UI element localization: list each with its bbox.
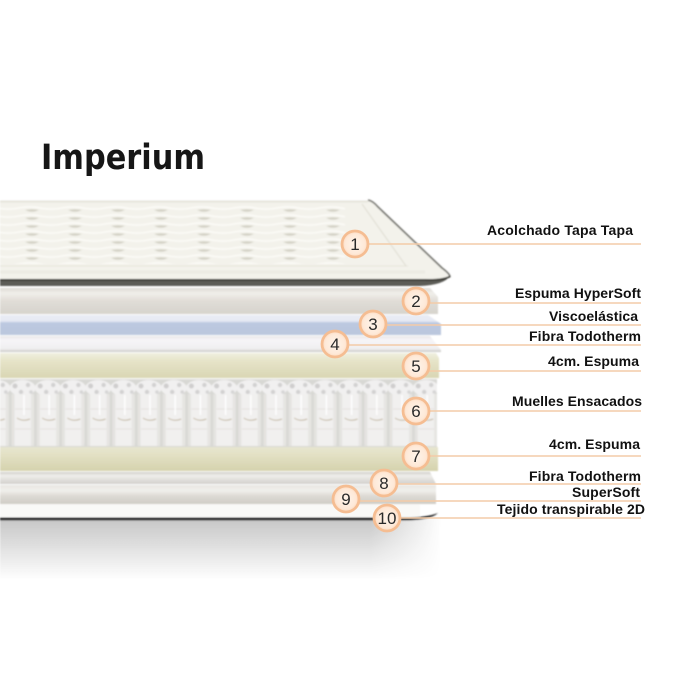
callout 7: 7 xyxy=(411,447,421,466)
callout 1: Acolchado Tapa Tapa xyxy=(487,222,633,238)
callout 1 xyxy=(342,222,641,257)
callout 4: 4 xyxy=(330,335,340,354)
callout 8: Fibra Todotherm xyxy=(529,468,641,484)
callout 3: 3 xyxy=(368,315,378,334)
callout 4: Fibra Todotherm xyxy=(529,328,641,344)
callout 5: 4cm. Espuma xyxy=(548,353,639,369)
title: Imperium xyxy=(41,138,205,178)
layer 7: 4 cm foam xyxy=(0,447,438,471)
callout 9: 9 xyxy=(341,490,351,509)
layer 10: 2D breathable fabric xyxy=(0,513,438,521)
layer 8: Todotherm fibre xyxy=(0,472,436,484)
callout 1: 1 xyxy=(350,235,360,254)
callout 6: Muelles Ensacados xyxy=(512,393,642,409)
layer 9: SuperSoft foam xyxy=(0,485,436,504)
callout 10 xyxy=(374,501,645,531)
callout 9: SuperSoft xyxy=(572,484,640,500)
callout 6 xyxy=(403,393,642,424)
mattress cross-section xyxy=(0,200,450,580)
layer 6: pocket springs xyxy=(0,379,437,448)
white base strip xyxy=(0,504,420,517)
callout 7 xyxy=(403,436,641,469)
callout 5: 5 xyxy=(411,357,421,376)
callout 3 xyxy=(360,308,641,337)
layer 5: 4 cm foam xyxy=(0,353,439,378)
callout 6: 6 xyxy=(411,402,421,421)
floor shadow xyxy=(0,518,442,580)
callout 3: Viscoelástica xyxy=(549,308,638,324)
callout 2: Espuma HyperSoft xyxy=(515,285,641,301)
callout 2: 2 xyxy=(411,292,421,311)
callout 10: 10 xyxy=(378,509,396,528)
callout 8 xyxy=(371,468,641,496)
callout 8: 8 xyxy=(379,474,389,493)
callout 9 xyxy=(333,484,641,512)
layer 1: quilted top cover xyxy=(0,200,450,286)
callout 4 xyxy=(322,328,641,357)
callout 10: Tejido transpirable 2D xyxy=(497,501,645,517)
callout 2 xyxy=(403,285,641,314)
layer 4: Todotherm fibre xyxy=(0,336,441,352)
layer 3: viscoelastic foam xyxy=(0,315,441,335)
callout 7: 4cm. Espuma xyxy=(549,436,640,452)
callout 5 xyxy=(403,353,641,379)
layer 2: HyperSoft foam xyxy=(0,288,438,314)
